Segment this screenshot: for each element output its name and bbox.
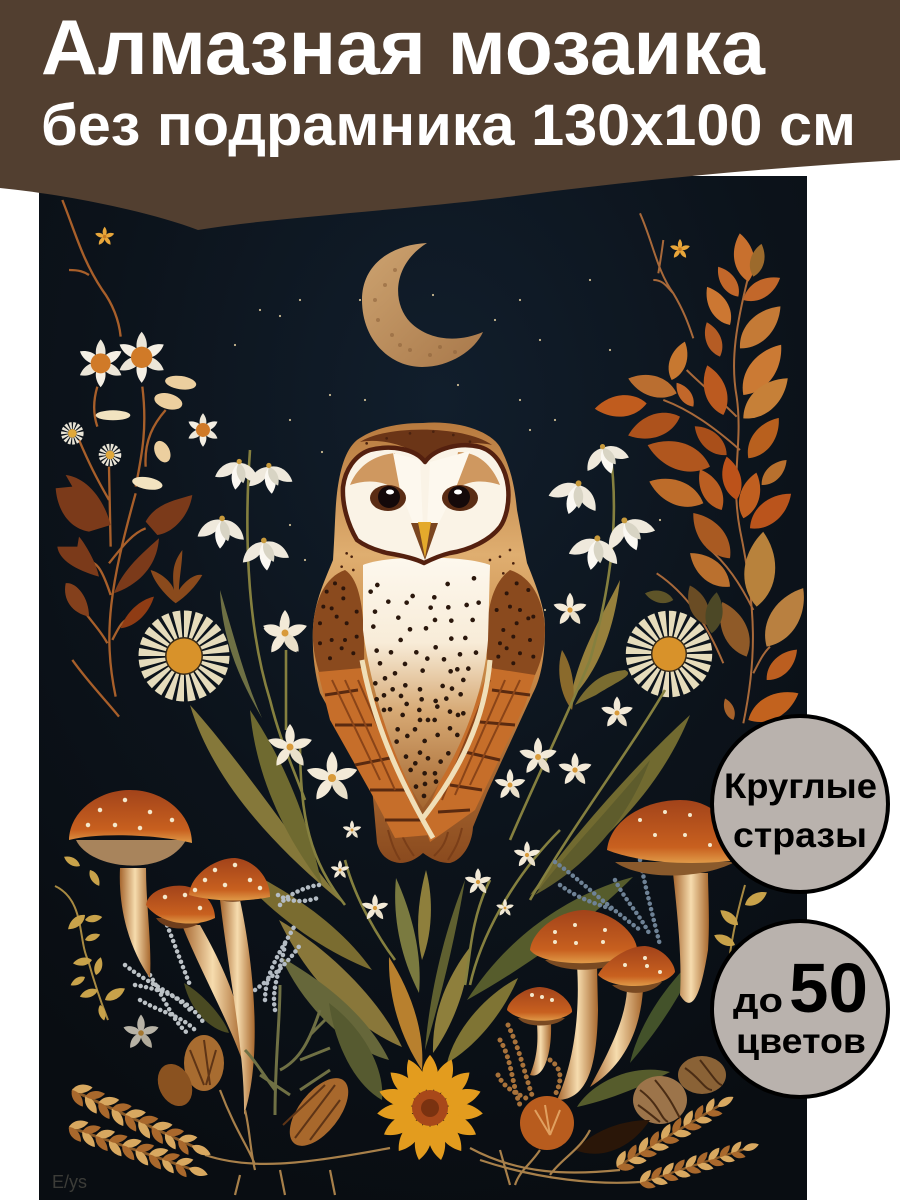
crescent moon <box>362 243 483 367</box>
owl face disc <box>343 445 508 563</box>
small yellow blossom top left <box>95 227 115 246</box>
owl breast <box>363 558 490 808</box>
wheat ears <box>62 1076 762 1195</box>
stems <box>62 200 166 717</box>
badge: up to 50 colours <box>712 921 888 1097</box>
gills <box>76 840 186 866</box>
stars <box>210 280 660 610</box>
small daisies <box>65 426 80 441</box>
mushrooms left <box>69 790 270 1115</box>
flower stems <box>247 450 665 985</box>
right autumn branch <box>594 213 815 730</box>
dark herbs <box>245 985 330 1115</box>
painting: owl in night forest <box>39 176 815 1200</box>
big daisies <box>153 625 698 687</box>
owl tail feather lines <box>388 828 462 860</box>
snowdrops <box>198 444 655 570</box>
caps <box>607 800 740 863</box>
branch stems <box>640 213 770 723</box>
mushrooms right <box>507 800 740 1100</box>
facial tan rays <box>350 452 500 488</box>
central white V <box>393 452 469 489</box>
left autumn branch <box>56 200 306 717</box>
caps <box>69 790 192 843</box>
narrow petal daisy <box>264 618 304 652</box>
small tan flower <box>122 1015 160 1050</box>
stems <box>673 873 709 1003</box>
badge: round rhinestones: Круглые <box>724 767 877 806</box>
owl wings <box>313 570 545 842</box>
badge: up to 50 colours: цветов <box>736 1022 866 1061</box>
beak <box>411 522 438 560</box>
header banner <box>0 0 900 230</box>
title: Алмазная мозаика <box>41 3 766 91</box>
sunflower <box>376 1055 484 1162</box>
signature: E/ys <box>52 1172 87 1192</box>
pale blue flower clusters <box>125 860 660 1105</box>
golden side foliage <box>55 854 769 1021</box>
daffodils <box>78 339 124 387</box>
breast spots <box>371 578 479 796</box>
small white star flowers <box>262 593 634 921</box>
seed pods <box>151 1035 726 1156</box>
night sky background <box>39 176 807 1200</box>
eyes <box>370 485 478 511</box>
badge: up to 50 colours: до <box>733 982 783 1020</box>
wing speckles <box>320 583 533 663</box>
owl head cap <box>360 430 492 460</box>
badge: up to 50 colours: 50 <box>789 949 868 1027</box>
barn owl <box>313 422 545 863</box>
subtitle: без подрамника 130х100 см <box>41 93 856 158</box>
stems <box>120 868 150 978</box>
small yellow blossom top right <box>669 239 690 259</box>
owl neck speckles <box>342 432 513 573</box>
pale caps <box>96 374 197 492</box>
long olive blades and stems <box>184 450 700 1107</box>
badge: round rhinestones: стразы <box>733 816 867 855</box>
badge: round rhinestones <box>712 716 888 892</box>
owl silhouette <box>313 422 545 863</box>
roots <box>205 1090 640 1195</box>
cream wing edges <box>362 660 490 838</box>
gills <box>615 862 735 876</box>
brown leaves <box>56 475 202 628</box>
